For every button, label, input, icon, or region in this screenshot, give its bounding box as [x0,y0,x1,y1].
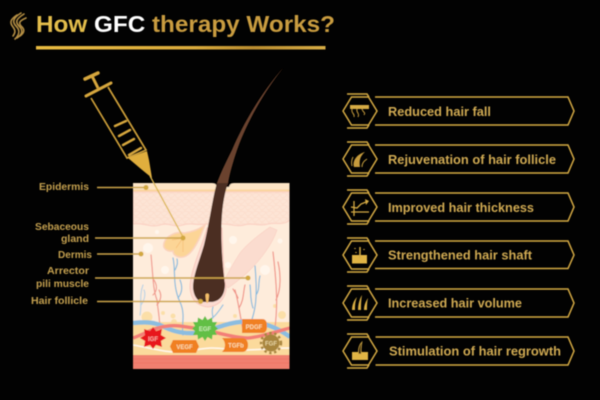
growth factor: VEGF [170,340,199,353]
anatomy illustration [133,68,290,369]
growth factor: PDGF [242,319,267,333]
growth factor: IGF [140,327,166,349]
deep tissue layer [133,322,290,356]
growth factor: FGF [261,333,281,353]
label: Arrector pili muscle: pili muscle [36,278,89,290]
label: Sebaceous gland [35,221,186,245]
epidermis top layer [133,183,290,190]
icon: falling hair [343,94,377,128]
title underline [36,46,326,50]
growth factor: EGF: EGF [199,327,211,333]
follicle sheath [190,228,226,307]
arrector pili muscle [223,227,277,288]
needle [150,176,183,237]
small vessels [140,252,280,335]
label: Arrector pili muscle: Arrector [47,265,89,277]
benefit: Increased hair volume: Increased hair volume [388,296,522,310]
lower tissue band [133,355,290,369]
label: Dermis [58,249,144,261]
fat bubbles [142,304,286,325]
blue vessel [133,322,290,337]
icon: hair regrowth [343,334,377,368]
growth factor: TGFb [222,338,248,352]
label: Sebaceous gland: gland [61,233,89,245]
benefit: Increased hair volume [343,286,574,320]
growth factor: PDGF: PDGF [246,325,263,331]
label: Hair follicle: Hair follicle [31,295,88,307]
label: Epidermis: Epidermis [39,181,89,193]
label: Dermis: Dermis [58,249,92,261]
label: Epidermis [39,181,148,193]
dermis highlights [143,230,282,275]
benefit: Improved hair thickness [343,190,574,224]
syringe [85,73,183,237]
benefit: Rejuvenation of hair follicle [343,142,574,176]
benefit: Reduced hair fall [343,94,574,128]
panel: skin cross-section [133,183,290,369]
sebaceous gland [164,225,205,257]
hair strand and root [193,68,283,302]
skin notch around hair [212,183,234,187]
growth factor: FGF: FGF [265,342,277,348]
icon: strengthened shaft [343,238,377,272]
benefit: Strengthened hair shaft: Strengthened hair shaft [388,248,533,262]
epidermis cells [165,196,213,208]
icon: several hairs [343,286,377,320]
benefit: Improved hair thickness: Improved hair thickness [388,201,534,215]
title: How GFC therapy Works? [36,11,335,37]
label: Sebaceous gland: Sebaceous [35,221,89,233]
label: Arrector pili muscle [36,265,250,290]
growth factor: TGFb: TGFb [228,344,244,350]
white nerve [133,345,290,352]
label: Hair follicle [31,295,203,307]
benefit: Rejuvenation of hair follicle: Rejuvenation of hair follicle [388,153,556,167]
logo: hair waves [11,13,26,39]
growth factor: EGF [192,316,218,341]
benefit: Stimulation of hair regrowth [343,334,574,368]
growth factor: VEGF: VEGF [176,345,193,351]
icon: hair follicle [343,142,377,176]
icon: rising hair chart [343,190,377,224]
benefit: Strengthened hair shaft [343,238,574,272]
benefit: Reduced hair fall: Reduced hair fall [388,105,491,119]
red vessel [133,326,290,338]
growth factor: IGF: IGF [148,337,158,343]
benefit: Stimulation of hair regrowth: Stimulation of hair regrowth [389,344,561,358]
hair papilla [206,294,209,303]
